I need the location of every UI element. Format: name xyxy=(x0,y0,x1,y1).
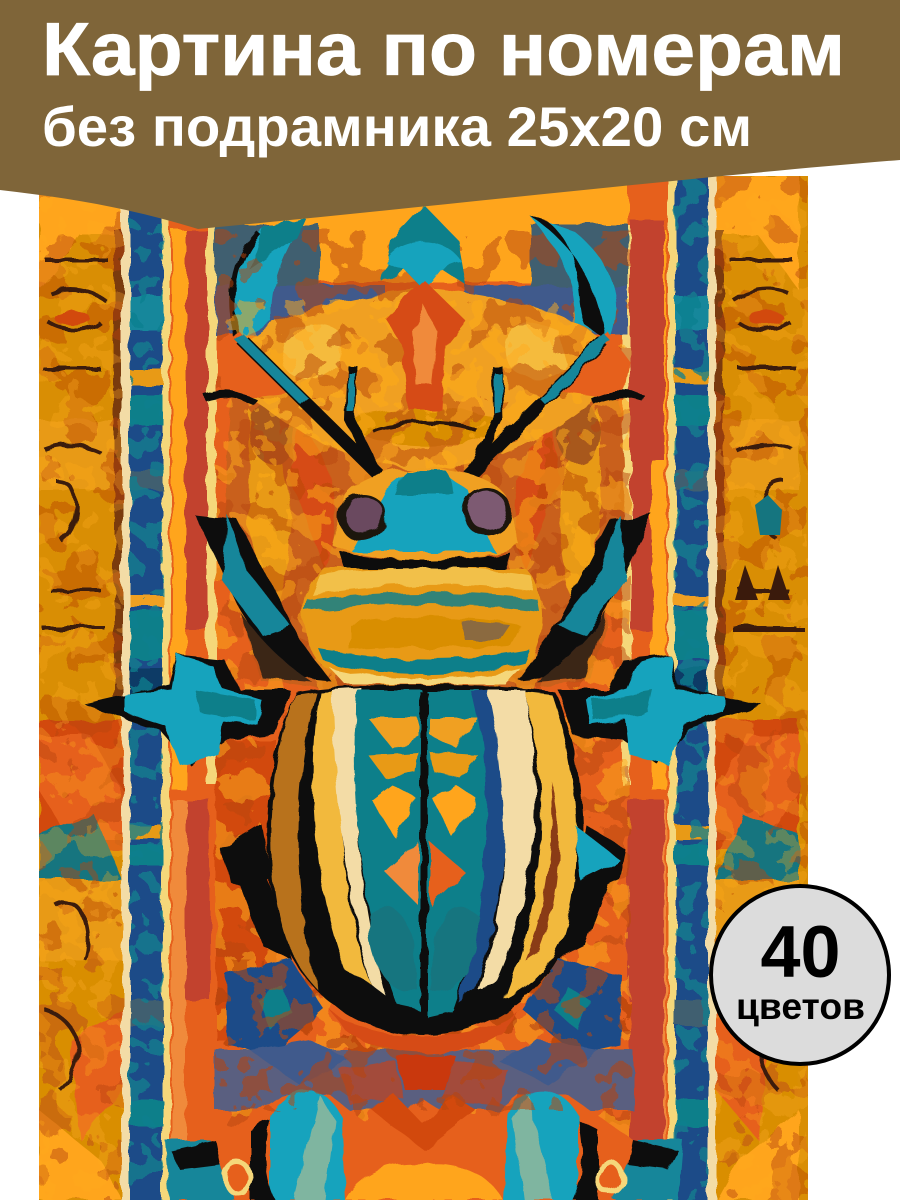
pronotum xyxy=(304,568,543,684)
dome centre ornament xyxy=(372,280,476,430)
left side strips xyxy=(39,170,216,1200)
title: Картина по номерам xyxy=(42,7,845,91)
eye left xyxy=(338,493,386,541)
mottled paint patches xyxy=(39,176,808,1200)
header banner xyxy=(0,0,900,229)
right antenna, legs and lower ornament xyxy=(424,332,763,1200)
upper back left xyxy=(215,216,385,345)
right antenna arc xyxy=(530,216,616,340)
right strip tint xyxy=(630,220,664,460)
beetle body field xyxy=(225,385,624,700)
right side strips xyxy=(622,170,799,1200)
elytra xyxy=(267,684,583,1052)
center background xyxy=(208,280,628,1200)
left antenna, legs and lower ornament xyxy=(85,332,424,1200)
badge: 40 colours: цветов xyxy=(736,986,865,1027)
upper back right xyxy=(465,285,628,335)
painting xyxy=(39,170,808,1200)
badge: 40 colours xyxy=(711,886,889,1064)
head dome xyxy=(245,288,606,470)
lower mottling xyxy=(216,960,630,1110)
badge: 40 colours: 40 xyxy=(760,912,840,993)
crown teal ornament xyxy=(382,205,466,290)
hieroglyph right detail xyxy=(733,495,805,632)
subtitle: без подрамника 25х20 см xyxy=(42,95,752,158)
eye right xyxy=(463,488,511,536)
left hieroglyphs xyxy=(42,260,108,1090)
beetle head xyxy=(332,468,520,568)
right hieroglyphs xyxy=(730,260,796,1090)
